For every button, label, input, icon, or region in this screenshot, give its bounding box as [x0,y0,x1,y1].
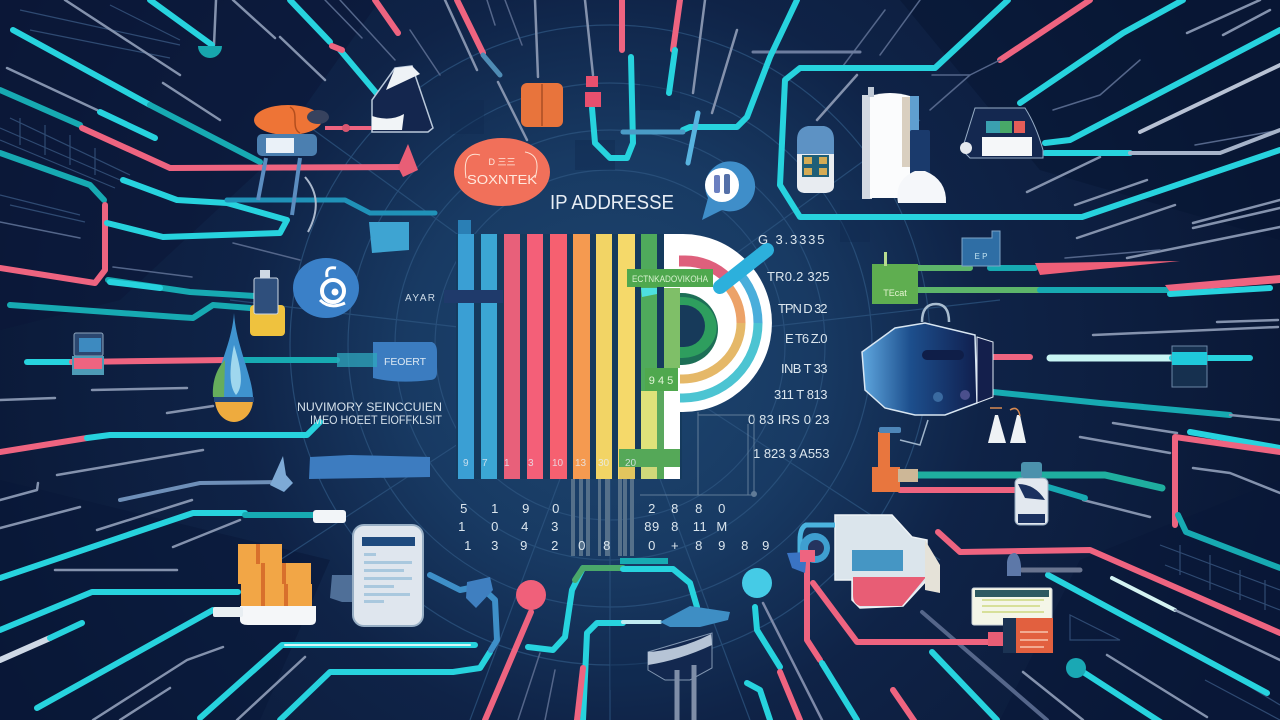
right value list: E T6 Z.0 [785,331,828,346]
bar value labels: 13 [575,458,587,469]
right value list: 311 T 813 [774,387,828,402]
icon: light blue box [369,222,409,253]
number grid: 89 [644,519,660,534]
number grid: 1 [491,501,499,516]
icon: blue connector [787,525,835,573]
text block: left caption [297,400,443,427]
number grid: 5 [460,501,468,516]
bracket lines under list [640,412,756,496]
number grid: 0 [491,519,499,534]
icon: dark cylinder [648,633,712,720]
number grid: 2 [551,538,559,553]
number grid: 9 [520,538,528,553]
pipes: top centre [457,0,797,163]
bar value labels [463,458,637,469]
badge: red oval: D 三三 [488,157,516,167]
number grid: 8 [695,538,703,553]
icon: large headset [862,304,993,415]
icon: document tablet [353,525,423,626]
number grid: 4 [521,519,529,534]
icon: cyan glass box [1172,346,1207,387]
bar value labels: 30 [598,458,610,469]
number grid: + [671,538,679,553]
number grid: 0 [718,501,726,516]
green number tag [645,368,678,391]
number grid: 0 [552,501,560,516]
title: IP ADDRESSE [550,192,674,214]
number grid: 3 [491,538,499,553]
icon: blue circle logo [293,258,359,318]
letter P rings [664,234,772,479]
icon: blue folder: E P [975,252,987,261]
pipes: bottom centre [485,561,857,720]
right value list: 0 83 IRS 0 23 [748,412,830,427]
number grid: 3 [551,519,559,534]
icon: orange crates on tray [213,544,316,625]
text block: left caption: NUVIMORY SEINCCUIEN [297,400,442,414]
number grid: 0 [578,538,586,553]
panel: blue bar [309,455,430,479]
green number tag: 9 4 5 [649,375,673,387]
blue pointer [720,250,767,287]
pipes: top left [0,0,435,318]
icon: white clip [313,510,346,523]
number grid: M [716,519,728,534]
icon: lock on grey bar [1007,553,1021,576]
pipes: left [0,360,497,720]
bar value labels: 7 [482,458,488,469]
number grid: 9 [522,501,530,516]
badge: report: FEOERT [384,356,427,368]
number grid: 9 [762,538,770,553]
icon: red label box [988,618,1053,653]
icon: green router: TEcat [883,288,907,298]
icon: notice card [972,588,1052,625]
right value list [748,232,830,461]
pipes: bottom right [813,532,1280,720]
right value list: INB T 33 [781,361,828,376]
icon: blue folder [962,231,1000,266]
number grid: 9 [718,538,726,553]
number grid [458,501,770,553]
icon: white connectors [988,408,1026,443]
green label [627,269,713,287]
icon: grey gears [330,575,352,602]
right value list: TPN D 32 [778,301,828,316]
badge: report [337,342,437,382]
icon: pink ball [516,580,546,610]
green crossbar [619,449,680,479]
icon: water drop [213,313,254,422]
label: AYAR: AYAR [405,293,435,304]
icon: card reader [960,108,1043,158]
badge: red oval: SOXNTEK [467,172,537,187]
icon: navy bottle [1015,462,1048,525]
pink clips [585,76,601,107]
number grid: 8 [695,501,703,516]
number grid: 8 [671,519,679,534]
number grid: 1 [458,519,466,534]
number grid: 0 [648,538,656,553]
right value list: G 3.3335 [758,232,825,247]
number grid: 8 [741,538,749,553]
pipes: right middle [900,261,1280,568]
number grid: 8 [671,501,679,516]
icon: blue disk [660,606,730,627]
number grid: 11 [693,519,707,534]
icon: blue SIM card [797,126,834,193]
pipes: top right [780,0,1280,217]
icon: white server device [862,87,946,203]
icon: monitor clip [72,333,104,375]
bar value labels: 3 [528,458,534,469]
bar value labels: 1 [504,458,510,469]
number grid: 1 [464,538,472,553]
number grid: 2 [648,501,656,516]
icon: yellow bottle [250,270,285,336]
right value list: TR0.2 325 [767,269,830,284]
colour bars [444,220,682,479]
bar value labels: 20 [625,458,637,469]
central IP chart [444,220,772,479]
text block: left caption: IMEO HOEET EIOFFKLSIT [310,413,443,427]
icon: speech bubble [702,161,755,220]
icon: orange bag [521,83,563,127]
icon: blue pipe joint [466,577,493,608]
grey stripes under bars [571,479,634,556]
icon: orange valve [872,420,928,492]
icon: blue handle [270,456,293,492]
icon: green router [872,252,918,304]
bar value labels: 10 [552,458,564,469]
icon: cyan ball [742,568,772,598]
bar value labels: 9 [463,458,469,469]
badge: red oval [454,138,550,206]
right value list: 1 823 3 A553 [753,446,830,461]
icon: orange mouse on white base [254,105,372,232]
cyan tab [641,288,657,297]
number grid: 8 [603,538,611,553]
icon: white and navy gadget [372,66,433,132]
icon: white and red device [835,515,940,608]
green label: ECTNKADOVIKOHA [632,274,709,285]
